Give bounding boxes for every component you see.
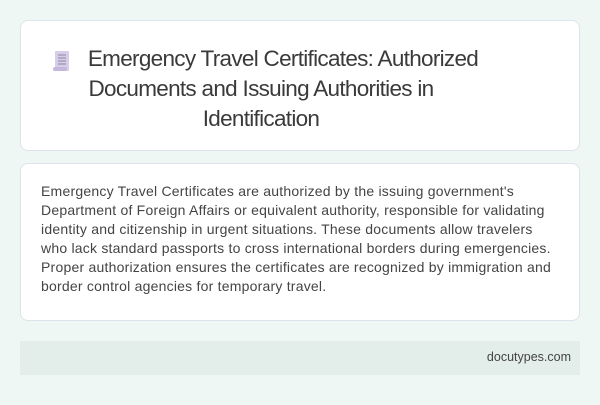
heading: Emergency Travel Certificates: Authorized	[88, 46, 478, 71]
icon: document	[53, 51, 69, 71]
panel: title	[20, 20, 580, 151]
text block	[41, 183, 551, 294]
text block: Emergency Travel Certificates are authorized by the issuing government's	[41, 183, 514, 199]
text block: Department of Foreign Affairs or equivalent authority, responsible for validating	[41, 202, 545, 218]
text block: border control agencies for temporary travel.	[41, 278, 326, 294]
text block: who lack standard passports to cross international borders during emergencies.	[41, 240, 551, 256]
heading: Documents and Issuing Authorities in	[88, 76, 434, 101]
text block: Proper authorization ensures the certificates are recognized by immigration and	[41, 259, 551, 275]
heading: Identification	[203, 106, 319, 131]
footer	[20, 341, 580, 375]
footer: docutypes.com	[487, 350, 571, 364]
text block: identity and citizenship in urgent situations. These documents allow travelers	[41, 221, 533, 237]
heading	[88, 46, 478, 131]
panel: description	[20, 163, 580, 321]
